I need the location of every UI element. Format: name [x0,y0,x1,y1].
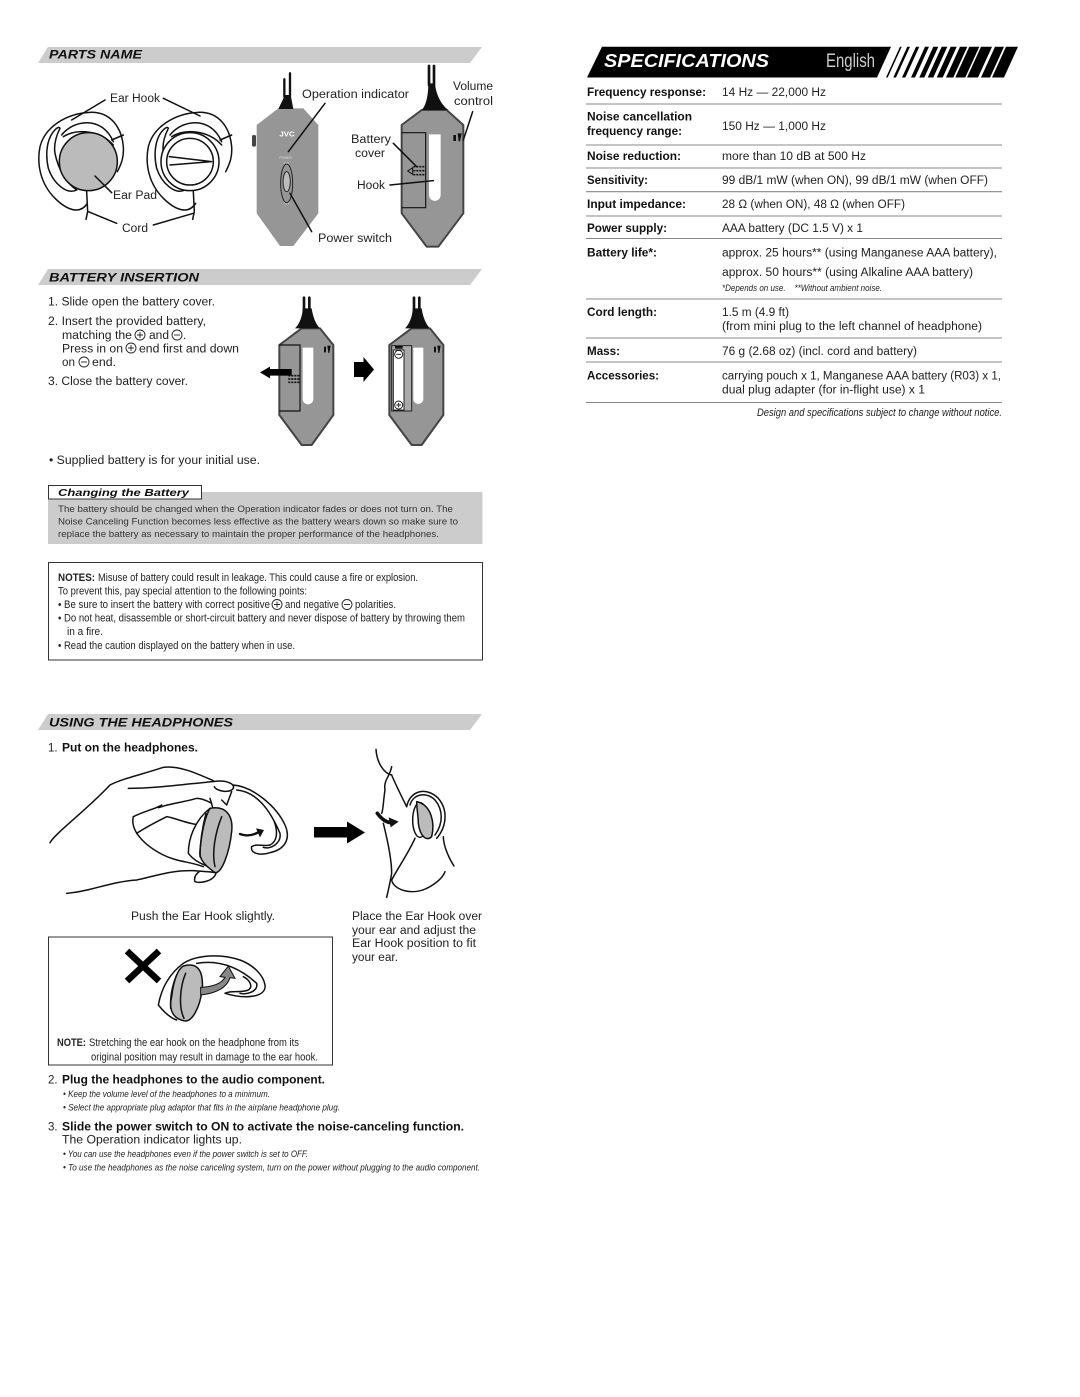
captions [131,911,482,964]
spec table: (from mini plug to the left channel of headphone) [722,321,982,333]
spec table: Accessories: [587,370,659,382]
diagram: remote front [252,73,325,246]
note text: NOTE: [57,1037,86,1049]
heading: battery insertion [38,269,482,285]
spec table: 14 Hz — 22,000 Hz [722,87,826,99]
spec table: 99 dB/1 mW (when ON), 99 dB/1 mW (when OFF) [722,175,988,187]
step 2: • Select the appropriate plug adaptor that fits in the airplane headphone plug. [63,1103,340,1114]
spec table: *Depends on use. **Without ambient noise. [722,283,882,294]
notes text: • Read the caution displayed on the battery when in use. [58,640,295,652]
step 2: 2. [48,1074,58,1086]
captions: your ear and adjust the [352,925,476,937]
spec table: dual plug adapter (for in-flight use) x 1 [722,384,925,396]
footnote: Design and specifications subject to change without notice. [757,407,1002,419]
spec table: Noise cancellation [587,112,692,124]
step 1 heading: Put on the headphones. [62,742,198,754]
spec table: Sensitivity: [587,175,648,187]
notes text: in a fire. [67,626,103,638]
notes text: • Be sure to insert the battery with correct positive [58,599,270,611]
heading: using the headphones [38,714,482,730]
heading: parts name [38,47,482,63]
diagram: remote front: ON [284,162,290,166]
labels: remote back: cover [355,148,385,160]
steps text: end first and down [139,344,239,356]
captions: Place the Ear Hook over [352,911,482,923]
heading banner: specifications [587,47,1018,78]
spec table: 150 Hz — 1,000 Hz [722,121,826,133]
labels: remote back: Hook [357,180,385,192]
label tab: Changing the Battery [58,487,190,499]
steps text: end. [92,357,116,369]
note text: Stretching the ear hook on the headphone from its [89,1037,299,1049]
labels: ear pieces: Ear Pad [113,190,157,202]
labels: remote back: Battery [351,134,391,146]
icon: cross [127,951,159,981]
notes text: Misuse of battery could result in leakage. This could cause a fire or explosion. [98,572,418,584]
spec table: Frequency response: [587,87,706,99]
spec table: more than 10 dB at 500 Hz [722,151,866,163]
labels: remote front [302,89,409,245]
step 2: • Keep the volume level of the headphones to a minimum. [63,1089,270,1100]
labels: remote back: Volume [453,81,493,93]
spec table: carrying pouch x 1, Manganese AAA battery (R03) x 1, [722,370,1001,382]
panel: battery insertion [38,269,482,467]
labels: ear pieces [110,93,160,235]
captions: Ear Hook position to fit [352,938,477,950]
spec table: Noise reduction: [587,151,681,163]
panel: specifications [586,47,1018,419]
labels: remote back: control [454,96,493,108]
captions: your ear. [352,952,398,964]
notes text: To prevent this, pay special attention to the following points: [58,586,307,598]
heading banner: specifications: SPECIFICATIONS [604,51,769,71]
spec table: approx. 50 hours** (using Alkaline AAA battery) [722,267,973,279]
diagram: ear pieces [39,98,232,225]
panel: warning note [48,937,332,1065]
notes text: and negative [285,599,339,611]
spec table: frequency range: [587,126,682,138]
steps text [48,297,239,388]
diagram: battery inserted [389,298,443,445]
arrow: next step [354,357,374,382]
steps text: . [183,330,186,342]
labels: ear pieces: Cord [122,223,148,235]
heading: parts name: PARTS NAME [49,48,143,62]
note text [57,1037,318,1064]
step 2 [48,1074,340,1114]
panel: changing the battery [48,486,482,544]
spec table: Battery life*: [587,248,657,260]
note text: original position may result in damage to the ear hook. [91,1052,318,1064]
spec table: Power supply: [587,223,667,235]
panel: notes [48,562,482,660]
step 3: • To use the headphones as the noise canceling system, turn on the power without plugging to the audio component. [63,1163,480,1174]
notes text [58,572,465,652]
steps text: and [149,330,169,342]
spec table: 28 Ω (when ON), 48 Ω (when OFF) [722,199,905,211]
note: supplied battery: • Supplied battery is for your initial use. [49,455,260,467]
diagram: remote front: OFF [284,202,290,206]
spec table: Mass: [587,346,620,358]
step 3: 3. [48,1122,58,1134]
label tab [48,486,202,499]
step 3: Slide the power switch to ON to activate the noise-canceling function. [62,1122,464,1134]
step 3 [48,1122,480,1174]
step 3: The Operation indicator lights up. [62,1134,242,1146]
labels: ear pieces: Ear Hook [110,93,160,105]
steps text: 1. Slide open the battery cover. [48,297,215,309]
illustration: headphone on ear [376,749,454,897]
diagram: remote front: POWER [279,156,293,160]
diagram: remote front: JVC [279,132,295,139]
steps text: 2. Insert the provided battery, [48,316,206,328]
steps text: matching the [62,330,132,342]
body text: replace the battery as necessary to maintain the proper performance of the headphones. [58,529,439,540]
arrow: next action [314,822,365,844]
body text [58,504,458,540]
labels: remote back [351,81,493,192]
labels: remote front: Operation indicator [302,89,409,101]
spec table: 1.5 m (4.9 ft) [722,307,789,319]
spec table: AAA battery (DC 1.5 V) x 1 [722,223,863,235]
body text: The battery should be changed when the Operation indicator fades or does not turn on. The [58,504,453,515]
steps text: 3. Close the battery cover. [48,376,188,388]
labels: remote front: Power switch [318,233,392,245]
illustration: hand holding headphone [50,767,287,893]
notes text: • Do not heat, disassemble or short-circuit battery and never dispose of battery by throwing them [58,612,465,624]
spec table: Input impedance: [587,199,686,211]
captions: Push the Ear Hook slightly. [131,911,275,923]
illustration: stretched ear hook [158,956,265,1021]
step 1 heading: 1. [48,742,58,754]
spec table [586,87,1002,402]
diagram: opening cover [260,298,333,445]
heading: battery insertion: BATTERY INSERTION [49,271,199,285]
spec table: Cord length: [587,307,657,319]
panel: parts name [38,47,493,247]
step 2: Plug the headphones to the audio component. [62,1074,325,1086]
notes text: NOTES: [58,572,95,584]
diagram: remote back [390,66,473,247]
step 3: • You can use the headphones even if the power switch is set to OFF. [63,1149,308,1160]
body text: Noise Canceling Function becomes less effective as the battery wears down so make sure to [58,516,458,528]
heading banner: specifications: English [826,51,875,72]
panel: using the headphones [38,714,482,1174]
spec table: approx. 25 hours** (using Manganese AAA battery), [722,248,997,260]
spec table: 76 g (2.68 oz) (incl. cord and battery) [722,346,917,358]
steps text: on [62,357,75,369]
heading: using the headphones: USING THE HEADPHONES [49,716,233,730]
notes text: polarities. [355,599,396,611]
steps text: Press in on [62,344,123,356]
